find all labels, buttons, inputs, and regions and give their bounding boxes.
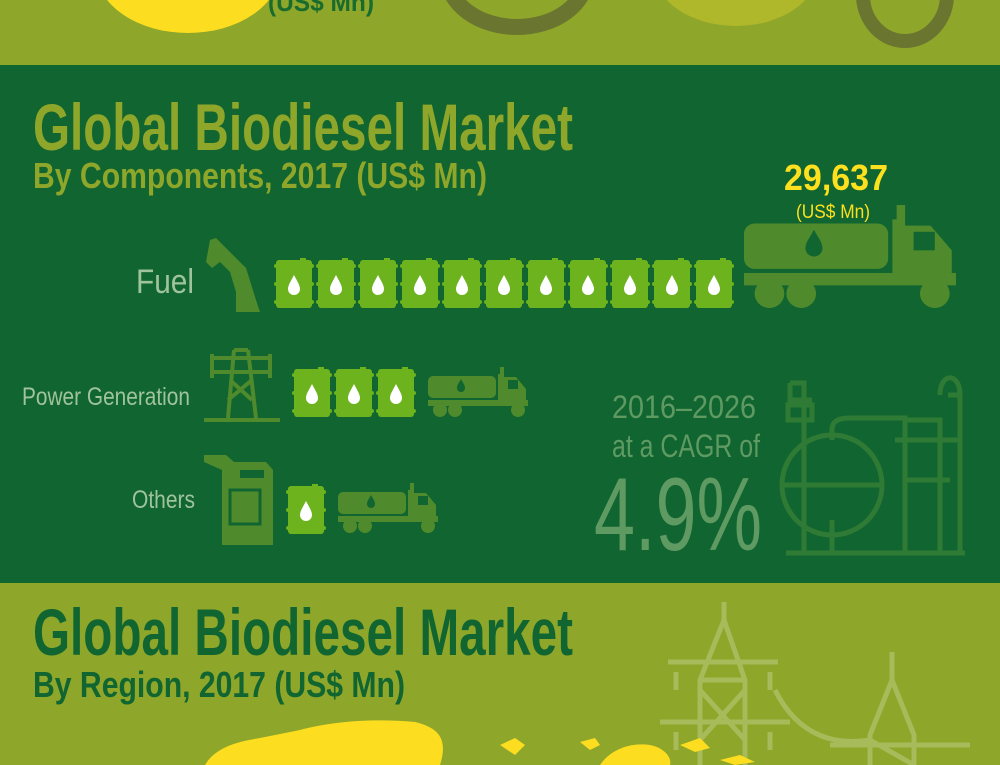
- icon: fuel pump nozzle: [206, 238, 260, 312]
- world map (partial): [205, 720, 755, 765]
- CAGR callout: 2016–2026: [612, 389, 756, 425]
- decorative dark ring: [447, 0, 587, 27]
- title: Global Biodiesel Market: [33, 90, 573, 164]
- subtitle region: By Region, 2017 (US$ Mn): [33, 664, 405, 705]
- top strip: [0, 0, 1000, 65]
- decorative yellow circle: [96, 0, 280, 33]
- value callout: (US$ Mn): [796, 202, 870, 223]
- value callout: [784, 157, 888, 223]
- panel: components: [0, 65, 1000, 583]
- icon: power tower: [204, 350, 280, 420]
- value callout: 29,637: [784, 157, 888, 198]
- row: power generation: Power Generation: [22, 383, 190, 411]
- barrels fuel: [274, 258, 734, 308]
- title region: Global Biodiesel Market: [33, 595, 573, 669]
- icon: big tanker truck: [744, 205, 956, 308]
- row: fuel: [136, 205, 956, 312]
- row: others: Others: [132, 486, 195, 514]
- decorative ring right: [863, 0, 947, 41]
- decorative olive circle: [654, 0, 818, 26]
- icon: tanker truck: [338, 483, 438, 533]
- row: power generation: [22, 350, 528, 420]
- icon: tanker truck: [428, 367, 528, 417]
- subtitle: By Components, 2017 (US$ Mn): [33, 155, 487, 196]
- label fuel: Fuel: [136, 263, 194, 301]
- CAGR callout: 4.9%: [594, 457, 762, 573]
- panel: region: [0, 580, 1000, 765]
- icon: refinery outline: [782, 378, 965, 553]
- CAGR callout: [594, 389, 762, 573]
- CAGR callout: at a CAGR of: [612, 428, 760, 464]
- icon: jerry can: [204, 455, 273, 545]
- row: others: [132, 455, 438, 545]
- icon: transmission towers: [660, 602, 970, 765]
